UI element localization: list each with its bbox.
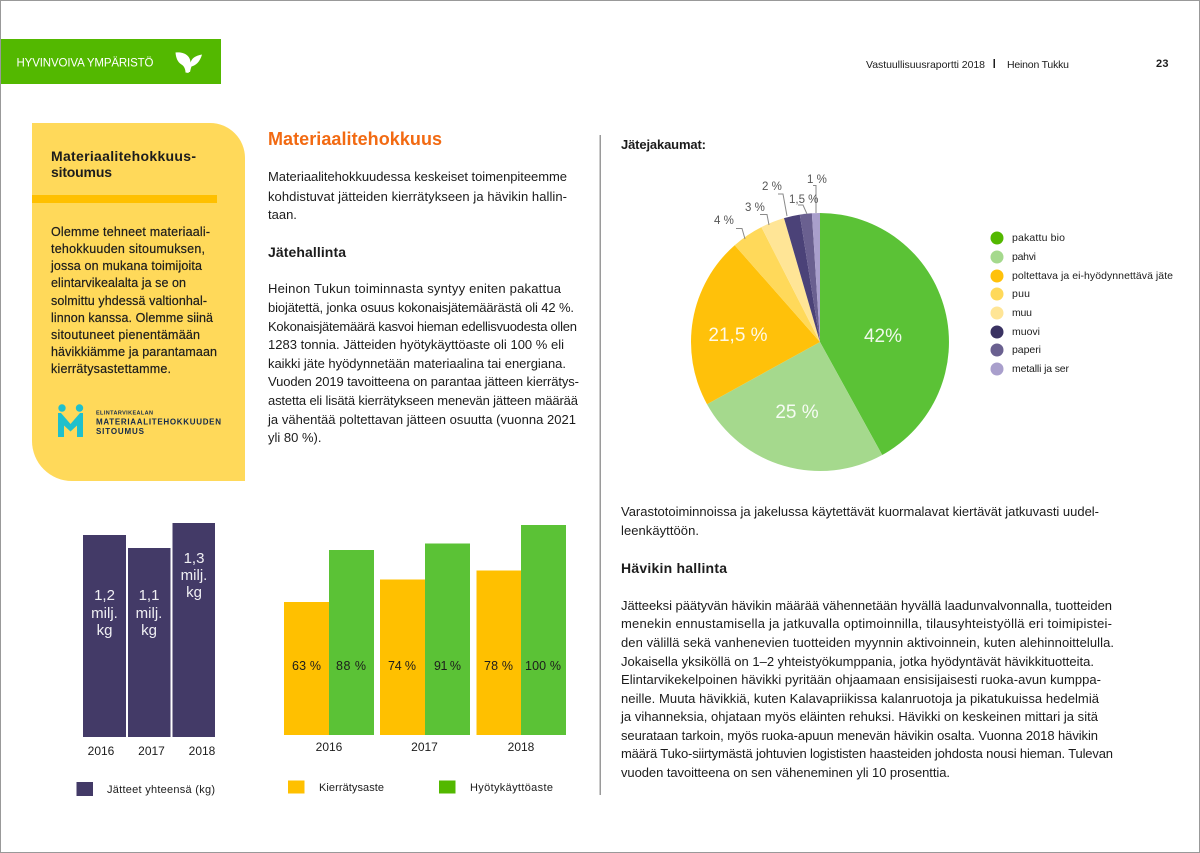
bar chart: recycling and utilisation rate: 88 % bbox=[336, 659, 366, 673]
logo: elintarvikealan materiaalitehokkuuden sitoumus: MATERIAALITEHOKKUUDEN bbox=[96, 418, 221, 426]
panel heading bbox=[51, 148, 196, 180]
panel body text: sitoutuneet pienentämään bbox=[51, 328, 200, 342]
text block: hävikin hallinta: määrä Tuko-siirtymästä johtuvien logististen haasteiden johdosta nousi hieman. Tulevan bbox=[621, 746, 1113, 761]
pie outer labels and leaders: 2 % bbox=[762, 181, 782, 193]
intro text: kohdistuvat jätteiden kierrätykseen ja hävikin hallin- bbox=[268, 189, 567, 204]
heading: jätejakaumat: Jätejakaumat: bbox=[621, 137, 706, 152]
panel body text: tehokkuuden sitoumuksen, bbox=[51, 242, 205, 256]
panel heading: sitoumus bbox=[51, 164, 112, 180]
pie legend bbox=[990, 232, 1173, 376]
heading: materiaalitehokkuus: Materiaalitehokkuus bbox=[268, 129, 442, 149]
bar chart: total waste: milj. bbox=[181, 567, 207, 584]
panel body text: kierrätysastettamme. bbox=[51, 362, 171, 376]
pie chart: waste distribution: 42% bbox=[864, 326, 902, 347]
text block: jätehallinta bbox=[267, 281, 579, 445]
text block: hävikin hallinta: Jokaisella yksiköllä on 1–2 yhteistyökumppania, jotka hyödyntävät hävikkituotteita. bbox=[621, 654, 1094, 669]
text block: hävikin hallinta: neille. Muuta hävikkiä, kuten Kalavapriikissa kalanruotoja ja pikatukuissa hedelmiä bbox=[621, 691, 1100, 706]
bar chart: total waste bbox=[83, 523, 216, 758]
pie legend: poltettava ja ei-hyödynnettävä jäte bbox=[1012, 270, 1173, 282]
panel body text: solmittu yhdessä valtionhal- bbox=[51, 294, 207, 308]
legend: recycling and utilisation rate bbox=[288, 780, 553, 794]
panel body text bbox=[50, 225, 217, 376]
text block: hävikin hallinta: ja vihanneksia, ohjataan myös eläinten rehuksi. Hävikki on keskeinen mittari ja sitä bbox=[620, 709, 1099, 724]
text block: jätehallinta: biojätettä, jonka osuus kokonaisjätemäärästä oli 42 %. bbox=[268, 300, 574, 315]
bar chart: recycling and utilisation rate: 63 % bbox=[292, 659, 321, 673]
running header: report name: Heinon Tukku bbox=[1007, 59, 1069, 71]
bar chart: recycling and utilisation rate: 91 % bbox=[434, 659, 461, 673]
bar chart: total waste: kg bbox=[97, 622, 112, 639]
bar chart: total waste: 1,1 bbox=[139, 587, 159, 604]
panel body text: jossa on mukana toimijoita bbox=[50, 259, 202, 273]
bar chart: total waste: 2017 bbox=[138, 744, 165, 758]
panel body text: linnon kanssa. Olemme siinä bbox=[51, 311, 213, 325]
panel heading: Materiaalitehokkuus- bbox=[51, 148, 196, 164]
pie chart: waste distribution: 25 % bbox=[775, 402, 819, 423]
text block: kuormalavat: leenkäyttöön. bbox=[621, 523, 699, 538]
text block: jätehallinta: astetta eli lisätä kierrätykseen menevän jätteen määrää bbox=[268, 393, 579, 408]
pie outer labels and leaders: 3 % bbox=[745, 202, 765, 214]
pie legend: muovi bbox=[1012, 326, 1040, 338]
pie legend: puu bbox=[1012, 288, 1030, 300]
bar chart: recycling and utilisation rate: 2018 bbox=[508, 740, 535, 754]
header band: section title: HYVINVOIVA YMPÄRISTÖ bbox=[16, 58, 154, 70]
pie legend: metalli ja ser bbox=[1012, 363, 1070, 375]
bar chart: total waste: milj. bbox=[136, 605, 162, 622]
bar chart: total waste: kg bbox=[186, 584, 202, 601]
text block: hävikin hallinta: Elintarvikekelpoinen hävikki pyritään ohjaamaan ensisijaisesti ruoka-avun kumppa- bbox=[621, 672, 1101, 687]
text block: kuormalavat bbox=[621, 504, 1099, 538]
legend: total waste bbox=[76, 782, 215, 796]
text block: hävikin hallinta: den välillä sekä vanhenevien tuotteiden myynnin aktivoinnein, kuten alehinnoittelulla. bbox=[621, 635, 1114, 650]
bar chart: recycling and utilisation rate bbox=[284, 525, 566, 754]
pie outer labels and leaders bbox=[714, 174, 827, 239]
panel body text: hävikkiämme ja parantamaan bbox=[51, 345, 217, 359]
text block: jätehallinta: yli 80 %). bbox=[268, 430, 321, 445]
pie legend: muu bbox=[1012, 307, 1032, 319]
page number: 23 bbox=[1156, 58, 1168, 70]
pie legend: pakattu bio bbox=[1012, 232, 1065, 244]
bar chart: recycling and utilisation rate: 2016 bbox=[316, 740, 343, 754]
text block: jätehallinta: kaikki jäte hyödynnetään materiaalina tai energiana. bbox=[268, 356, 566, 371]
bar chart: recycling and utilisation rate: 2017 bbox=[411, 740, 438, 754]
heading: hävikin hallinta: Hävikin hallinta bbox=[621, 560, 727, 576]
text block: kuormalavat: Varastotoiminnoissa ja jakelussa käytettävät kuormalavat kiertävät jatkuvasti uudel- bbox=[621, 504, 1099, 519]
text block: jätehallinta: Kokonaisjätemäärä kasvoi hieman edellisvuodesta ollen bbox=[268, 319, 577, 334]
bar chart: total waste: 2018 bbox=[189, 744, 216, 758]
text block: hävikin hallinta bbox=[620, 598, 1114, 780]
text block: jätehallinta: ja vähentää poltettavan jätteen osuutta (vuonna 2021 bbox=[267, 412, 576, 427]
panel: materiaalitehokkuussitoumus bbox=[32, 123, 245, 481]
bar chart: recycling and utilisation rate: 100 % bbox=[525, 659, 561, 673]
bar chart: recycling and utilisation rate: 74 % bbox=[388, 659, 416, 673]
heading: jätehallinta: Jätehallinta bbox=[268, 244, 346, 260]
text block: jätehallinta: 1283 tonnia. Jätteiden hyötykäyttöaste oli 100 % eli bbox=[268, 337, 564, 352]
text block: hävikin hallinta: vuoden tavoitteena on sen väheneminen yli 10 prosenttia. bbox=[621, 765, 950, 780]
intro text: taan. bbox=[268, 207, 297, 222]
text block: jätehallinta: Heinon Tukun toiminnasta syntyy eniten pakattua bbox=[268, 281, 562, 296]
legend: recycling and utilisation rate: Kierrätysaste bbox=[319, 782, 384, 794]
logo: elintarvikealan materiaalitehokkuuden sitoumus: SITOUMUS bbox=[96, 427, 145, 436]
pie outer labels and leaders: 4 % bbox=[714, 215, 734, 227]
panel body text: Olemme tehneet materiaali- bbox=[51, 225, 210, 239]
icon: leaf sprout bbox=[176, 52, 202, 73]
pie outer labels and leaders: 1,5 % bbox=[789, 194, 818, 206]
text block: hävikin hallinta: menekin ennustamisella ja jatkuvalla optimoinnilla, tilausyhteistyöllä eri toimipistei- bbox=[621, 616, 1112, 631]
header band: section title bbox=[1, 39, 221, 84]
running header: report name: Vastuullisuusraportti 2018 bbox=[866, 59, 985, 71]
bar chart: total waste: 1,2 bbox=[94, 587, 115, 604]
text block: hävikin hallinta: Jätteeksi päätyvän hävikin määrää vähennetään hyvällä laadunvalvonnalla, tuotteiden bbox=[621, 598, 1112, 613]
pie outer labels and leaders: 1 % bbox=[807, 174, 827, 186]
bar chart: total waste: 2016 bbox=[88, 744, 115, 758]
legend: total waste: Jätteet yhteensä (kg) bbox=[107, 784, 215, 796]
pie chart: waste distribution bbox=[691, 174, 949, 471]
pie chart: waste distribution: 21,5 % bbox=[708, 325, 768, 346]
pie legend: pahvi bbox=[1012, 251, 1036, 263]
bar chart: recycling and utilisation rate: 78 % bbox=[484, 659, 513, 673]
bar chart: total waste: milj. bbox=[91, 605, 118, 622]
logo: elintarvikealan materiaalitehokkuuden sitoumus: ELINTARVIKEALAN bbox=[96, 410, 153, 416]
bar chart: total waste: kg bbox=[141, 622, 157, 639]
running header: report name bbox=[866, 59, 1069, 71]
intro text: Materiaalitehokkuudessa keskeiset toimenpiteemme bbox=[268, 169, 567, 184]
intro text bbox=[268, 169, 567, 222]
panel body text: elintarvikealalta ja se on bbox=[51, 276, 186, 290]
bar chart: total waste: 1,3 bbox=[184, 550, 204, 567]
logo: elintarvikealan materiaalitehokkuuden sitoumus bbox=[58, 404, 221, 437]
legend: recycling and utilisation rate: Hyötykäyttöaste bbox=[470, 782, 553, 794]
pie legend: paperi bbox=[1012, 344, 1041, 356]
text block: jätehallinta: Vuoden 2019 tavoitteena on parantaa jätteen kierrätys- bbox=[268, 374, 579, 389]
text block: hävikin hallinta: seurataan tarkoin, myös ruoka-apuun menevän hävikin osalta. Vuonna 2018 hävikin bbox=[621, 728, 1098, 743]
